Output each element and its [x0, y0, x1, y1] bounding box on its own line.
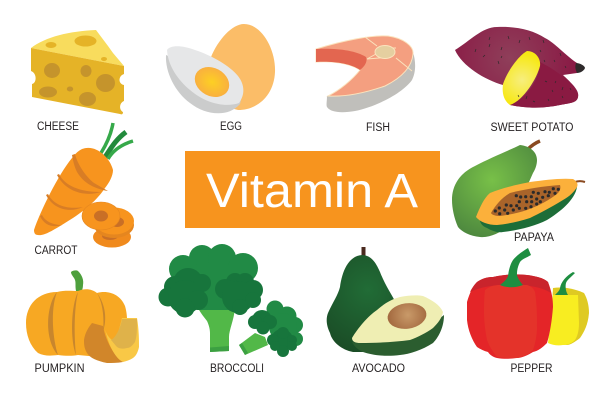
icon: sweet potato [455, 27, 585, 108]
icon: egg [166, 24, 275, 113]
icon: papaya [452, 141, 585, 237]
icon: broccoli [158, 244, 303, 357]
label: egg: EGG [220, 121, 242, 133]
label: pumpkin: PUMPKIN [34, 363, 84, 375]
label: cheese: CHEESE [37, 121, 79, 133]
label: papaya: PAPAYA [514, 232, 554, 244]
label: sweet potato: SWEET POTATO [490, 122, 574, 134]
icon: pepper [467, 248, 589, 359]
panel: title: Vitamin A [206, 165, 418, 218]
label: carrot: CARROT [34, 245, 78, 257]
icon: carrot [34, 123, 134, 248]
label: fish: FISH [366, 122, 390, 134]
icon: fish [316, 36, 415, 112]
panel: title [185, 151, 440, 228]
label: broccoli: BROCCOLI [210, 363, 264, 375]
label: pepper: PEPPER [510, 363, 552, 375]
label: avocado: AVOCADO [352, 363, 405, 375]
icon: cheese [31, 30, 124, 114]
icon: avocado [327, 247, 444, 356]
icon: pumpkin [26, 270, 139, 363]
